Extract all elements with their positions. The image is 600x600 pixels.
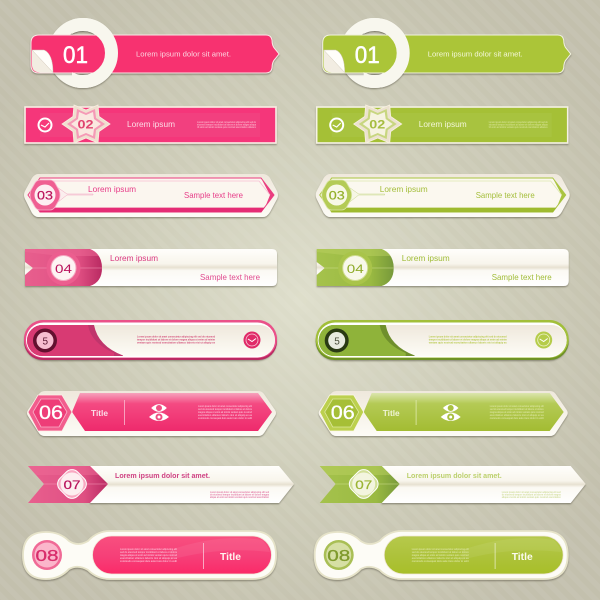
banner 02 green (317, 105, 568, 143)
small text: do eiusmod tempor incididunt ut labore et dolore magna (502, 492, 561, 496)
banner 02 (25, 105, 276, 143)
banner 04 green: 04 (347, 262, 364, 276)
icon: eyes (149, 404, 169, 421)
small text: eiusmod tempor incididunt ut labore et dolore magna aliqua (489, 122, 548, 126)
banner 03 (24, 174, 278, 217)
small text: Lorem ipsum dolor sit amet consectetur adipiscing elit (490, 404, 544, 408)
icon: clock (38, 118, 52, 132)
banner 06: Title (91, 408, 108, 418)
banner 08 (23, 531, 276, 579)
small text: commodo consequat duis aute irure dolor in velit (198, 416, 252, 420)
banner 04 green: Lorem ipsum (402, 254, 450, 263)
small text (197, 120, 256, 129)
small text (137, 334, 215, 344)
small text: tempor incididunt ut labore et dolore magna aliqua ut enim ad minim (429, 338, 507, 342)
banner 07 (28, 466, 294, 503)
banner 01 green: Lorem ipsum dolor sit amet. (428, 50, 523, 58)
icon: clock (535, 332, 552, 348)
small text: Lorem ipsum dolor sit amet consectetur adipiscing elit sed do eiusmod (137, 334, 215, 338)
banner 06 green: 06 (331, 403, 355, 424)
banner 03: Lorem ipsum (88, 185, 136, 194)
small text: sed do eiusmod tempor incididunt ut labore et dolore (490, 407, 544, 411)
banner 08 green: 08 (327, 548, 350, 565)
banner 03: Sample text here (184, 191, 243, 200)
small text: commodo consequat duis aute irure dolor in velit (490, 416, 544, 420)
banner 07: Lorem ipsum dolor sit amet. (115, 471, 210, 480)
banner 04 green: Sample text here (492, 273, 552, 282)
small text: exercitation ullamco laboris nisi ut aliquip ex ea (120, 556, 177, 560)
small text: Lorem ipsum dolor sit amet consectetur adipiscing elit sed (210, 490, 269, 494)
banner 03 green: Lorem ipsum (380, 185, 428, 194)
banner 06: 06 (39, 403, 63, 424)
banner 04 (25, 249, 277, 286)
banner 05 green (312, 320, 569, 360)
banner 05 (20, 320, 277, 360)
banner 04: 04 (55, 262, 72, 276)
banner 07: 07 (64, 478, 81, 492)
banner 01 green: 01 (355, 42, 380, 69)
icon: clock (329, 118, 344, 132)
small text (502, 490, 561, 499)
banner 06 green: Title (383, 408, 400, 418)
banner 01: 01 (63, 42, 88, 69)
small text: Lorem ipsum dolor sit amet consectetur adipiscing elit sed do eiusmod (429, 334, 507, 338)
small text (412, 547, 469, 563)
banner 01 (31, 24, 279, 82)
column: pink banners (20, 24, 294, 579)
banner 02 green: Lorem ipsum (419, 119, 467, 129)
small text: exercitation ullamco laboris nisi ut aliquip ex ea (198, 413, 252, 417)
small text: sed do eiusmod tempor incididunt ut labore et dolore (198, 407, 252, 411)
small text: magna aliqua ut enim ad minim veniam quis nostrud (198, 410, 252, 414)
small text (198, 404, 252, 420)
small text: aliqua ut enim ad minim veniam quis nostrud exercitation (502, 495, 561, 499)
small text: eiusmod tempor incididunt ut labore et dolore magna aliqua (197, 122, 256, 126)
badge 03: 03 (329, 188, 345, 202)
badge 03: 03 (37, 188, 53, 202)
small text: exercitation ullamco laboris nisi ut aliquip ex ea (490, 413, 544, 417)
small text: aliqua ut enim ad minim veniam quis nostrud exercitation (210, 495, 269, 499)
small text: commodo consequat duis aute irure dolor in velit (412, 559, 469, 563)
small text: sed do eiusmod tempor incididunt ut labore et dolore (412, 550, 469, 554)
banner 07 green: Lorem ipsum dolor sit amet. (407, 471, 502, 480)
small text: Lorem ipsum dolor sit amet consectetur adipiscing elit (412, 547, 469, 551)
small text: Lorem ipsum dolor sit amet consectetur adipiscing elit sed do (489, 120, 548, 124)
banner 03 green (316, 174, 570, 217)
column: green banners (312, 24, 586, 579)
small text (120, 547, 177, 563)
banner 01 green (323, 24, 571, 82)
small text: exercitation ullamco laboris nisi ut aliquip ex ea (412, 556, 469, 560)
small text (210, 490, 269, 499)
icon: eyes (441, 404, 461, 421)
small text: Lorem ipsum dolor sit amet consectetur adipiscing elit sed (502, 490, 561, 494)
small text (489, 120, 548, 129)
small text: Lorem ipsum dolor sit amet consectetur adipiscing elit (120, 547, 177, 551)
banner 01: Lorem ipsum dolor sit amet. (136, 50, 231, 58)
banner 04 green (317, 249, 569, 286)
banner 07 green: 07 (355, 478, 373, 492)
banner 08: Title (220, 552, 241, 563)
small text: veniam quis nostrud exercitation ullamco laboris nisi ut aliquip ex (429, 340, 507, 344)
banner 08 green (315, 531, 568, 579)
small text: magna aliqua ut enim ad minim veniam quis nostrud (412, 553, 469, 557)
small text: sed do eiusmod tempor incididunt ut labore et dolore (120, 550, 177, 554)
banner 08: 08 (36, 548, 58, 565)
star badge: 02 (78, 120, 94, 132)
small text: magna aliqua ut enim ad minim veniam quis nostrud (490, 410, 544, 414)
small text: Ut enim ad minim veniam quis nostrud exercitation ullamco (197, 125, 256, 129)
small text: do eiusmod tempor incididunt ut labore et dolore magna (210, 492, 269, 496)
star badge: 02 (369, 120, 385, 132)
small text (429, 334, 507, 344)
small text: veniam quis nostrud exercitation ullamco laboris nisi ut aliquip ex (137, 340, 215, 344)
banner 06 green (319, 391, 568, 436)
banner 05: 5 (42, 336, 48, 348)
badge 03 (30, 180, 93, 210)
badge 03 (322, 180, 385, 210)
banner 02: Lorem ipsum (127, 119, 175, 129)
small text: tempor incididunt ut labore et dolore magna aliqua ut enim ad minim (137, 338, 215, 342)
small text: Lorem ipsum dolor sit amet consectetur adipiscing elit (198, 404, 252, 408)
small text (490, 404, 544, 420)
star badge (62, 105, 110, 143)
banner 08 green: Title (512, 552, 533, 563)
icon: clock (244, 332, 260, 348)
small text: Ut enim ad minim veniam quis nostrud exercitation ullamco (489, 125, 548, 129)
banner 04: Lorem ipsum (110, 254, 158, 263)
banner 07 green (320, 466, 586, 503)
banner 03 green: Sample text here (476, 191, 535, 200)
banner 06 (27, 391, 276, 436)
banner 05 green: 5 (334, 336, 340, 348)
small text: magna aliqua ut enim ad minim veniam quis nostrud (120, 553, 177, 557)
star badge (354, 105, 402, 143)
small text: commodo consequat duis aute irure dolor in velit (120, 559, 177, 563)
banner 04: Sample text here (200, 273, 260, 282)
small text: Lorem ipsum dolor sit amet consectetur adipiscing elit sed do (197, 120, 256, 124)
